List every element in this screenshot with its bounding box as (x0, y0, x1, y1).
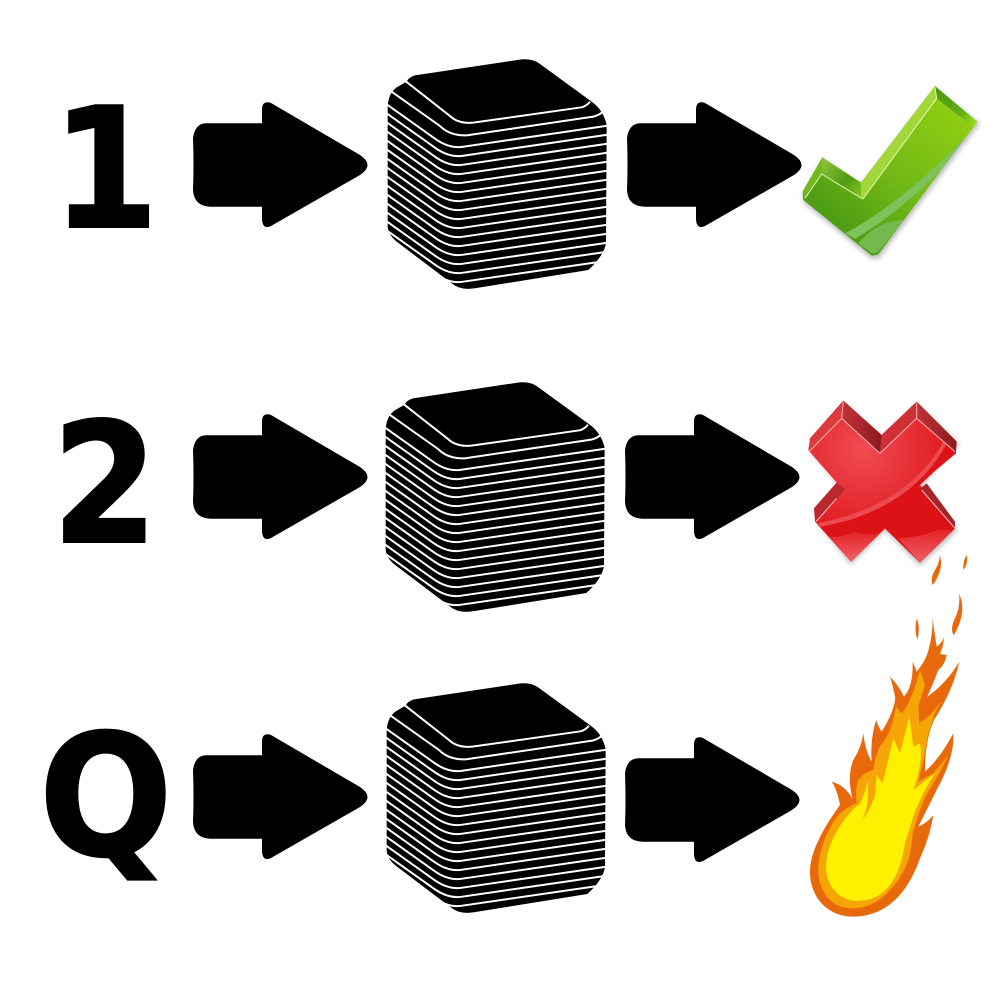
arrow: row 1 output (627, 102, 802, 227)
flame droplets (915, 555, 967, 639)
label: Q: Q (39, 700, 173, 895)
flame core (826, 717, 935, 901)
icon: stacked cube, row 1 (384, 59, 609, 289)
label: 2: 2 (52, 387, 158, 582)
icon: green check mark (803, 86, 980, 259)
icon: red cross (808, 401, 960, 567)
arrow: row 3 input (193, 734, 368, 859)
flame middle (818, 670, 948, 908)
label: 1: 1 (52, 72, 159, 267)
arrow: row 2 output (625, 414, 800, 539)
arrow: row 3 output (625, 737, 800, 862)
flame outer (810, 618, 959, 917)
icon: stacked cube, row 3 (383, 683, 608, 913)
arrow: row 2 input (193, 414, 368, 539)
icon: flame (810, 555, 967, 917)
icon: stacked cube, row 2 (382, 382, 607, 612)
arrow: row 1 input (193, 102, 368, 227)
